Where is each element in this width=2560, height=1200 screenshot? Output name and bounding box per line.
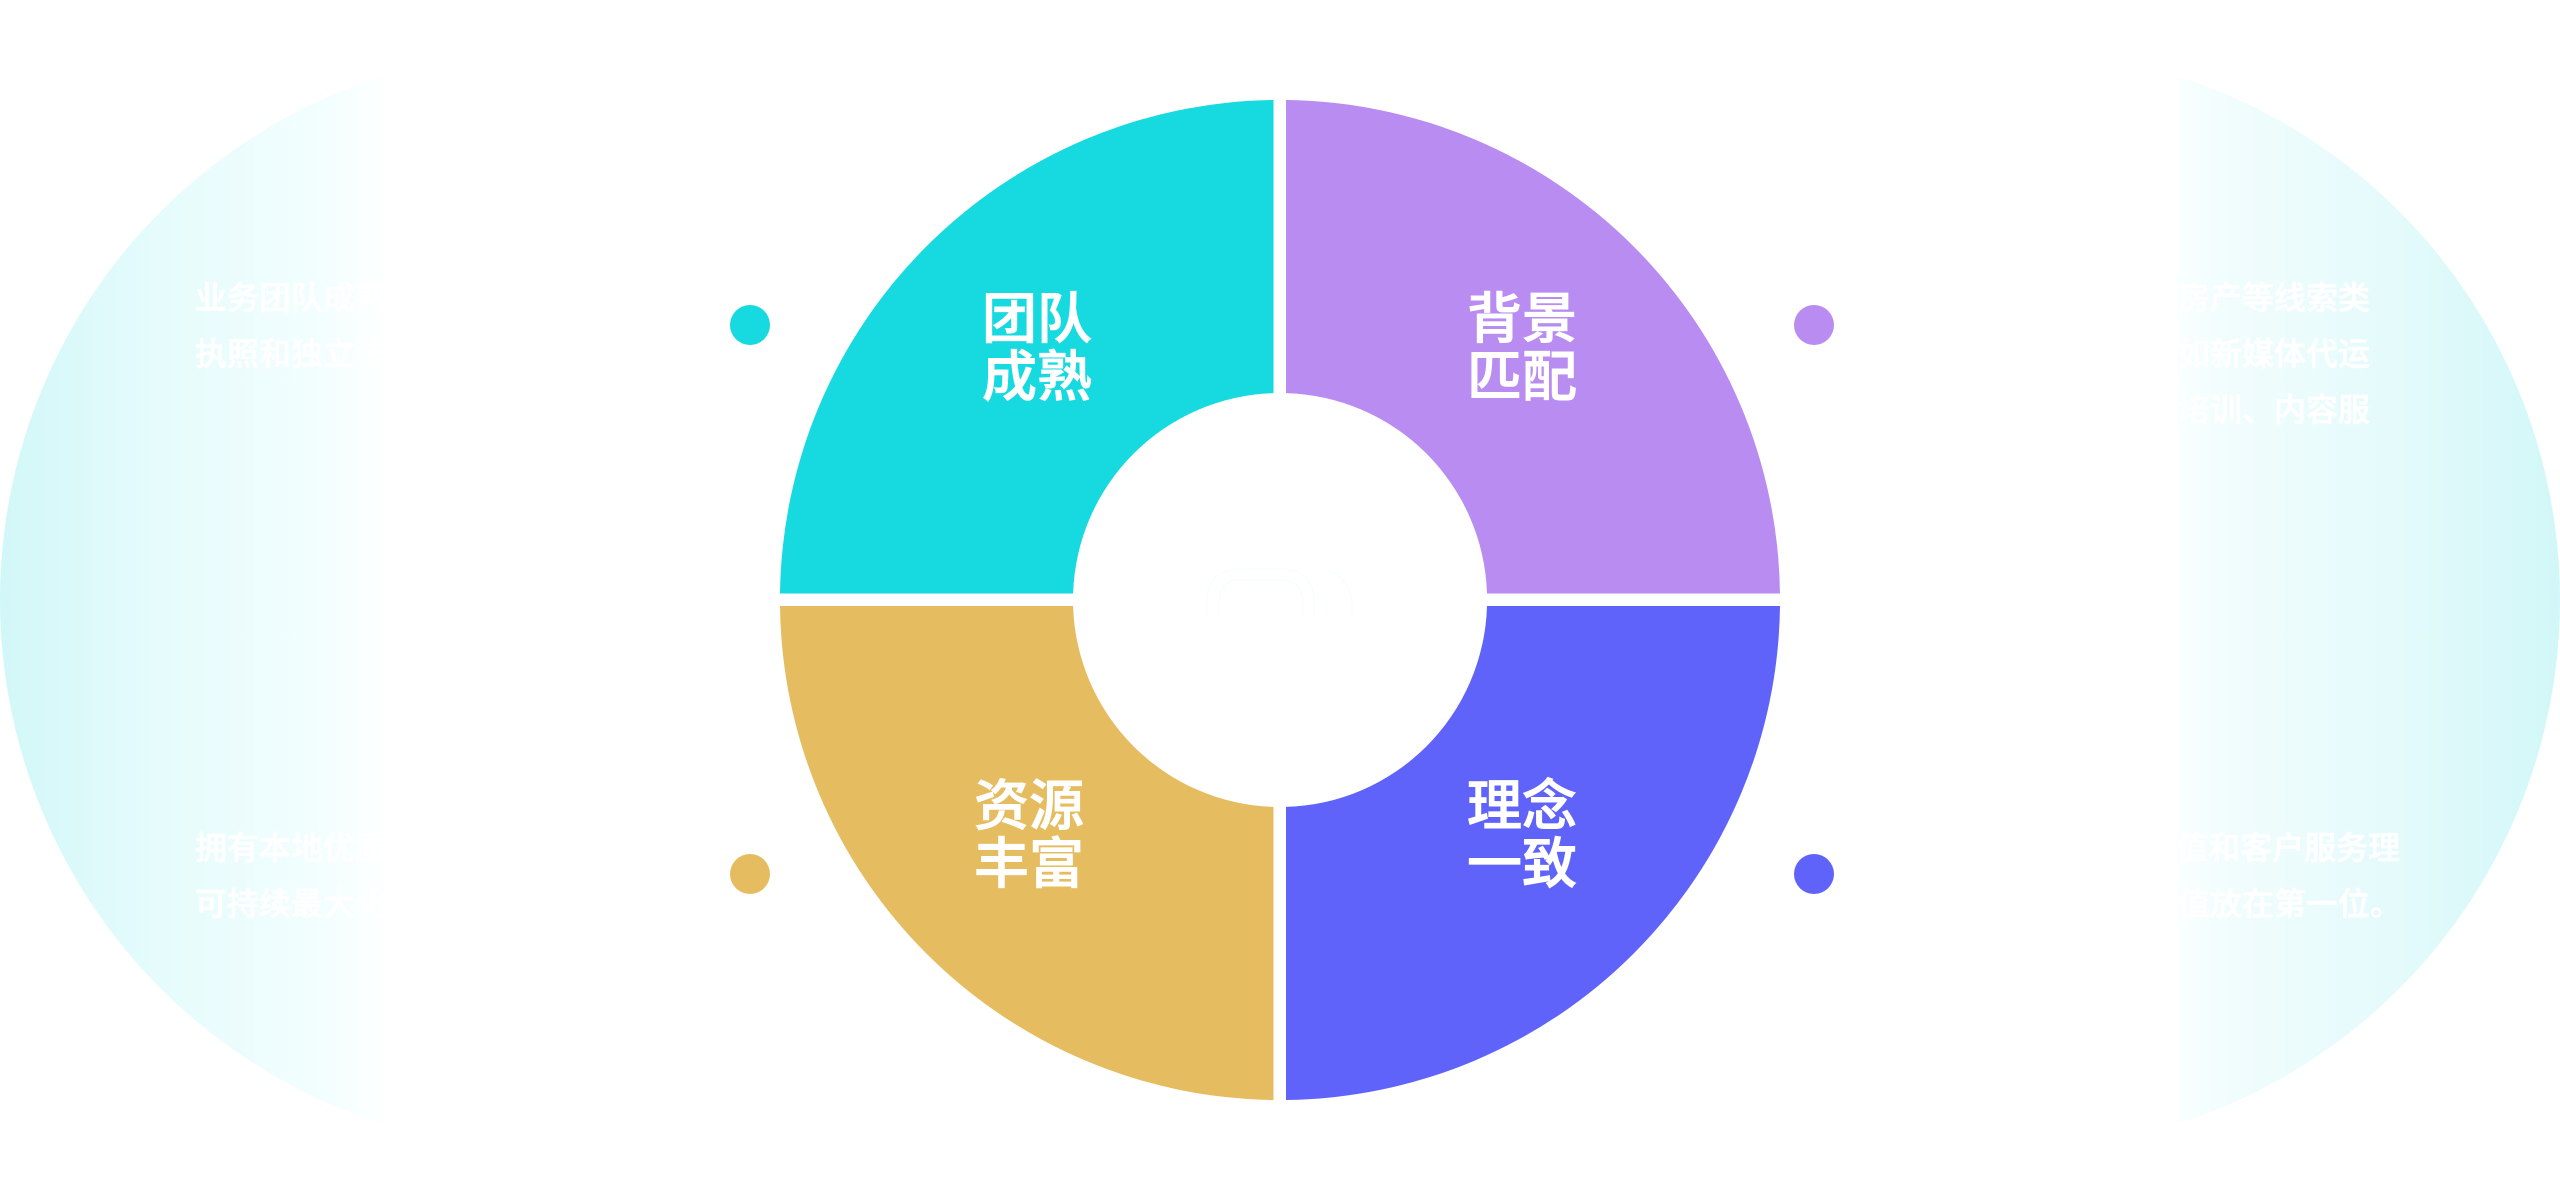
dot: background match xyxy=(1794,305,1834,345)
segment: background match xyxy=(1286,100,1780,594)
segment: rich resources: 丰富 xyxy=(974,833,1084,895)
segment: rich resources: 资源 xyxy=(974,775,1084,837)
segment: team maturity: 团队 xyxy=(982,288,1092,350)
text block: team maturity: 业务团队成熟稳定，有合法营业 xyxy=(195,280,643,316)
text block: aligned philosophy xyxy=(1922,830,2402,922)
segment: team maturity xyxy=(780,100,1274,594)
text block: team maturity: 执照和独立法人资质。 xyxy=(195,336,515,372)
text block: team maturity xyxy=(195,280,643,372)
segment: aligned philosophy: 理念 xyxy=(1467,775,1577,837)
text block: background match: 营、陪跑、投流、培训、内容服 xyxy=(1922,392,2370,428)
segment: aligned philosophy xyxy=(1286,606,1780,1100)
dot: rich resources xyxy=(730,854,770,894)
center label: 合作伙伴 xyxy=(1200,653,1360,697)
text block: background match: 务岗等。 xyxy=(1922,448,2050,484)
donut chart xyxy=(780,100,1780,1100)
text block: background match xyxy=(1922,280,2370,484)
segment: team maturity: 成熟 xyxy=(982,346,1092,408)
right background circle xyxy=(2191,82,2560,1118)
dot: team maturity xyxy=(730,305,770,345)
text block: aligned philosophy: 念，始终把客户价值放在第一位。 xyxy=(1922,886,2402,922)
center icon and label xyxy=(1200,569,1360,697)
text block: rich resources: 拥有本地优质稳定的客户资源， xyxy=(195,830,643,866)
text block: rich resources: 可持续最大化开发本地市场。 xyxy=(195,886,611,922)
segment: background match: 背景 xyxy=(1467,288,1577,350)
text block: background match: 行业服务背景。例如新媒体代运 xyxy=(1922,336,2370,372)
segment: aligned philosophy: 一致 xyxy=(1467,833,1577,895)
segment: background match: 匹配 xyxy=(1467,346,1577,408)
text block: rich resources xyxy=(195,830,643,922)
dot: aligned philosophy xyxy=(1794,854,1834,894)
left background circle xyxy=(0,90,346,1110)
segment: rich resources xyxy=(780,606,1274,1100)
text block: background match: 具备汽车、家居、房产等线索类 xyxy=(1922,280,2370,316)
text block: aligned philosophy: 认同百聆AI产品价值和客户服务理 xyxy=(1922,830,2400,866)
icon: partnership xyxy=(1207,569,1352,617)
